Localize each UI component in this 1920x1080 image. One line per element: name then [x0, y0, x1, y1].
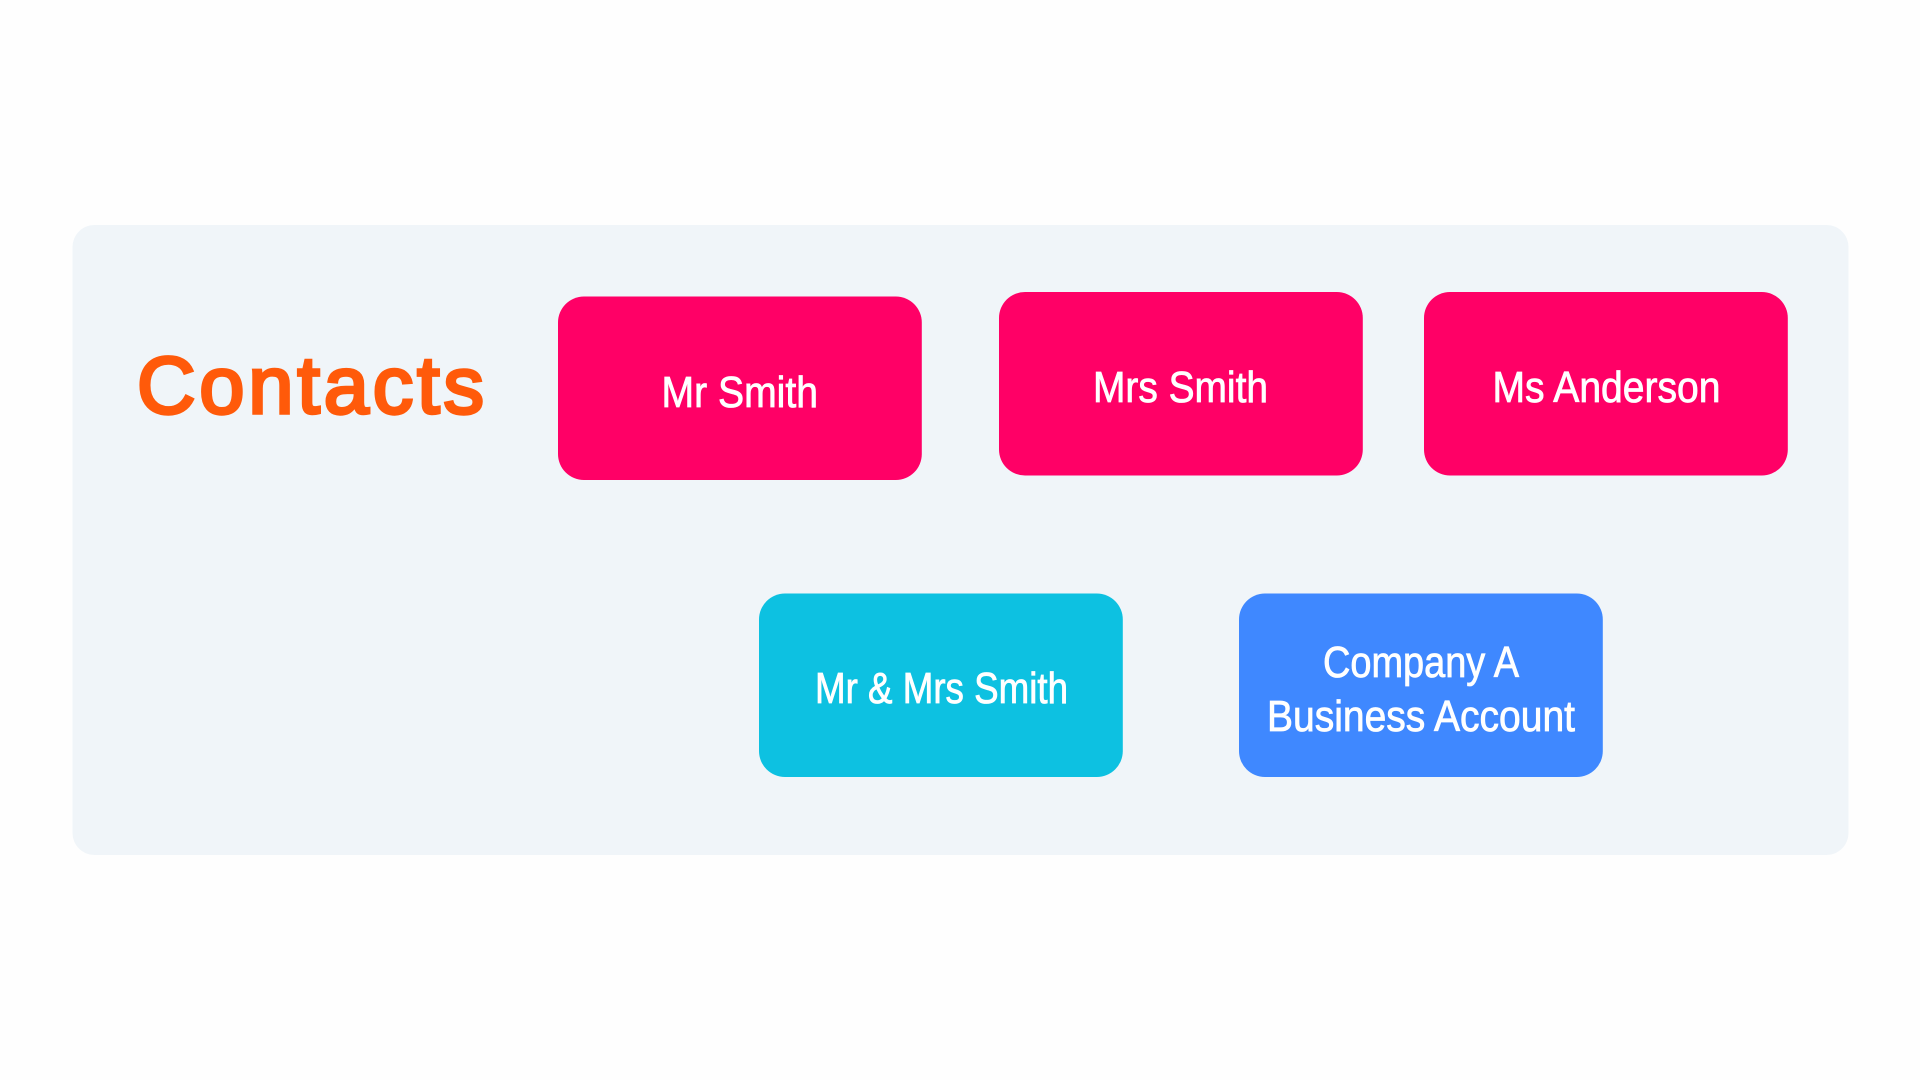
- contact card: Ms Anderson: Ms Anderson: [1492, 363, 1720, 412]
- joint account card: Mr & Mrs Smith: [759, 594, 1123, 777]
- business account card: Company A: [1239, 594, 1603, 777]
- contact card: Mrs Smith: [999, 292, 1363, 476]
- contact card: Mr Smith: Mr Smith: [662, 368, 818, 417]
- panel: contacts: [72, 225, 1848, 855]
- title: Contacts: Contacts: [137, 341, 484, 431]
- contact card: Ms Anderson: [1424, 292, 1788, 476]
- joint account card: Mr & Mrs Smith: Mr & Mrs Smith: [815, 664, 1068, 713]
- business account card: Company A: Business Account: [1267, 692, 1575, 741]
- business account card: Company A: Company A: [1323, 638, 1520, 687]
- contact card: Mr Smith: [558, 296, 922, 480]
- contact card: Mrs Smith: Mrs Smith: [1093, 363, 1268, 412]
